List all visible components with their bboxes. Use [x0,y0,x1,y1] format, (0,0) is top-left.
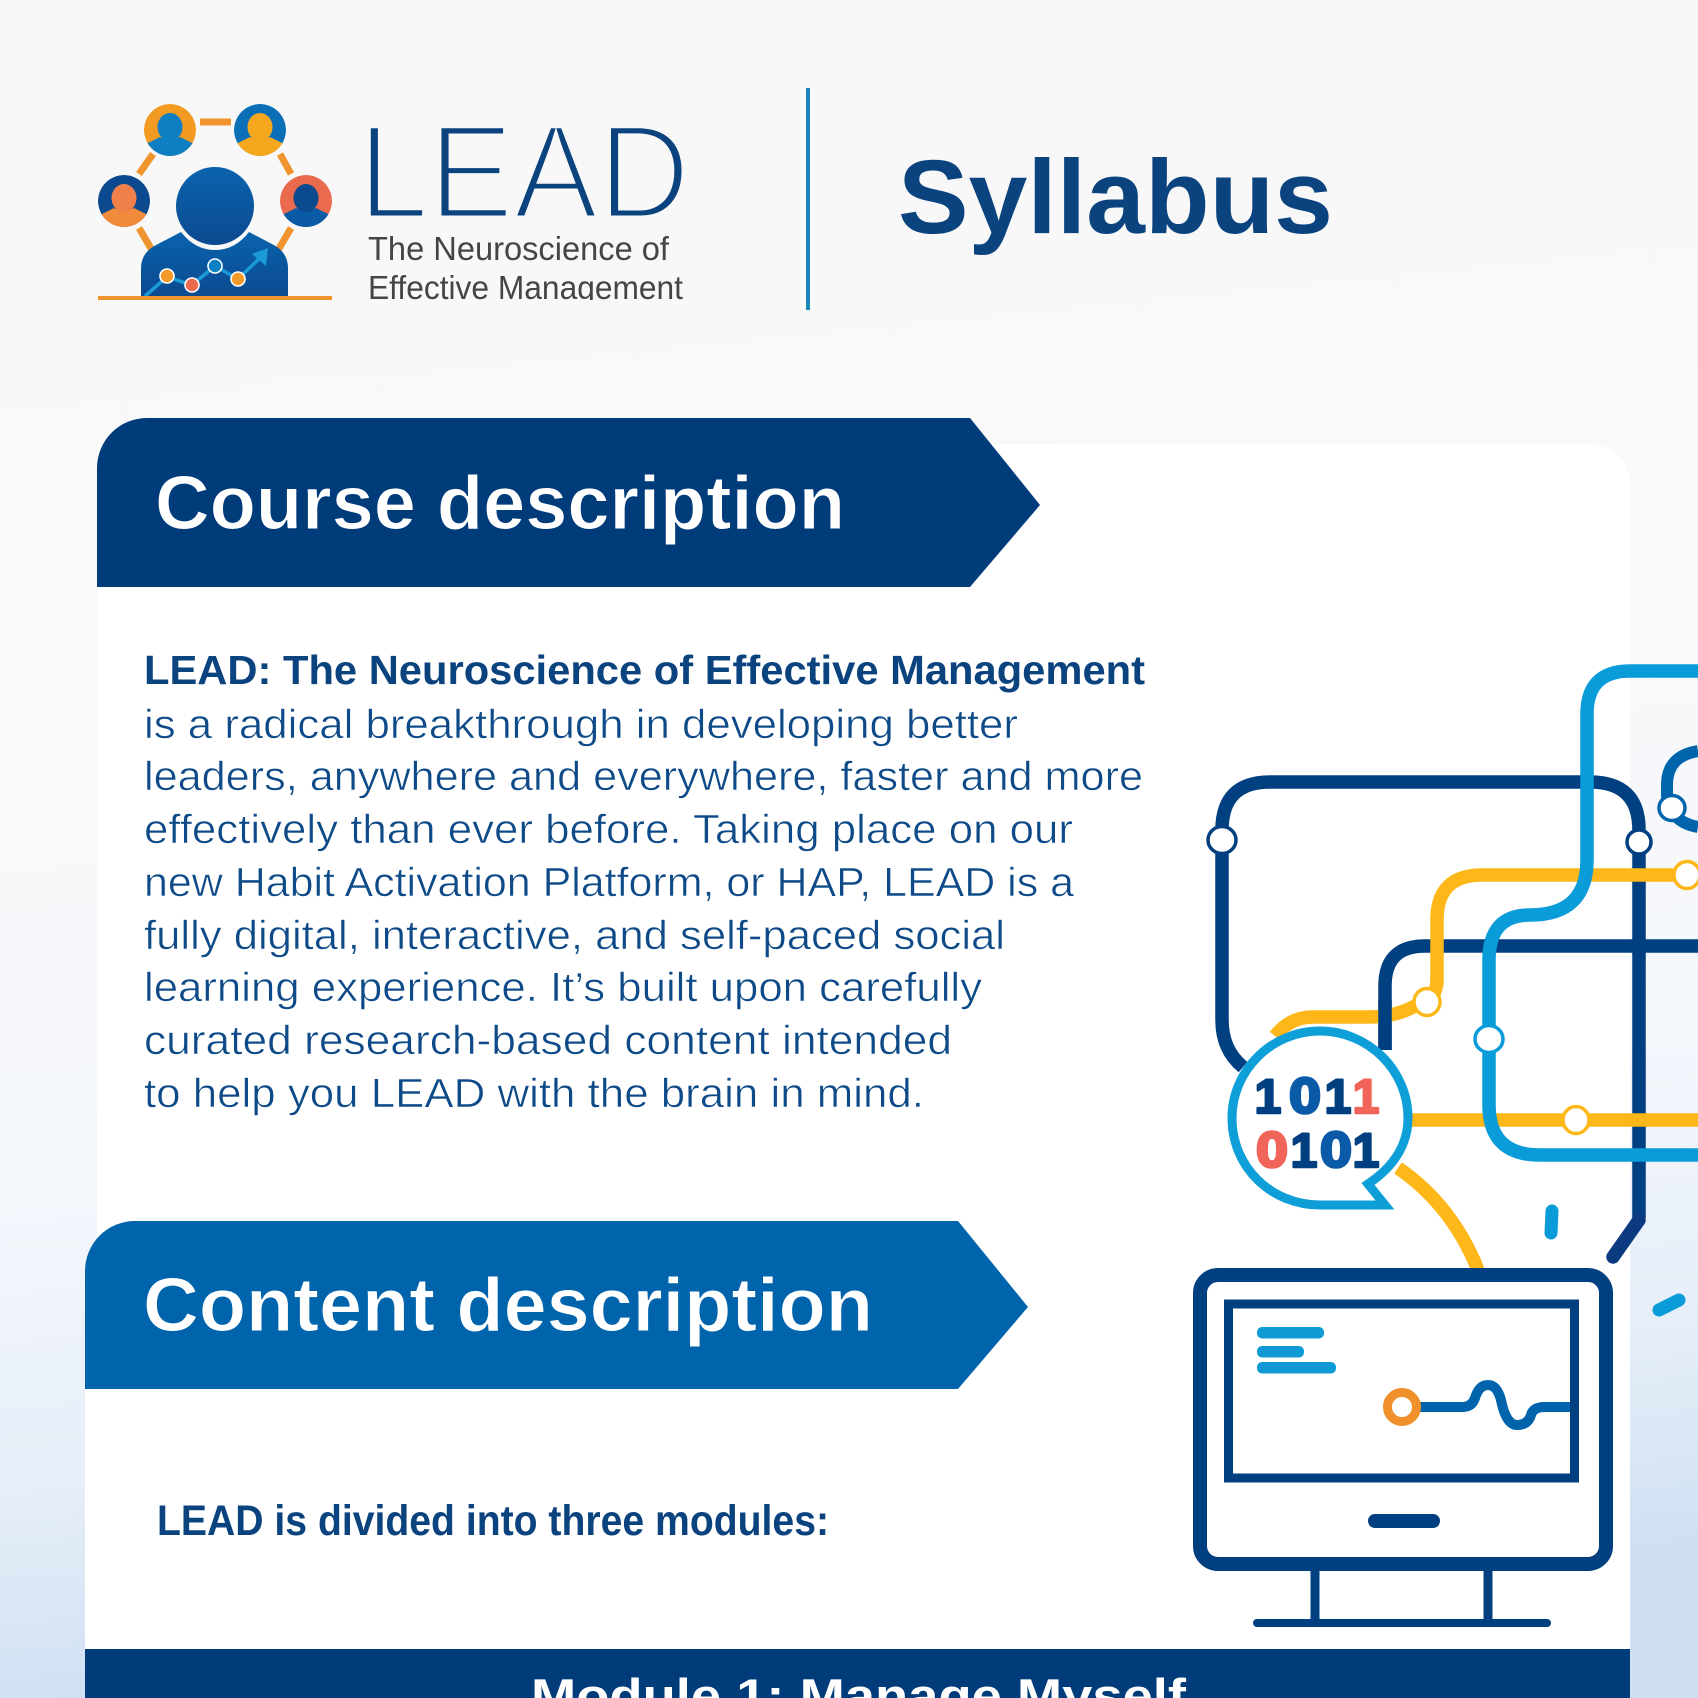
yellow line: upper [1275,875,1698,1036]
logo tagline: Effective Management [368,269,683,306]
banner: Course description [97,418,1040,587]
headset arc [1667,751,1698,827]
text block: course description body: new Habit Activation Platform, or HAP, LEAD is a [144,859,1074,905]
speech bubble: binary: 1 [1325,1071,1351,1124]
title: Syllabus: Syllabus [898,139,1333,256]
yellow line: middle [1405,1113,1698,1127]
navy line: inner [1385,946,1698,1050]
text: modules intro: LEAD is divided into three modules: [157,1497,829,1545]
speech bubble: binary: 0 [1256,1124,1288,1179]
banner: Content description: Content description [143,1263,873,1348]
text block: course description body: effectively than ever before. Taking place on our [144,806,1073,852]
speech bubble: binary: 0 [1320,1124,1352,1179]
text block: course description body: to help you LEAD with the brain in mind. [144,1070,924,1116]
speech bubble: binary [1232,1031,1408,1205]
header divider [806,88,810,310]
text block: course description body: leaders, anywhere and everywhere, faster and more [144,753,1143,799]
logo tagline: The Neuroscience of [368,230,670,267]
navy line: tail [1613,1220,1639,1257]
banner: Content description [85,1221,1028,1389]
text block: course description body [144,647,1145,1116]
text block: course description body: is a radical breakthrough in developing better [144,701,1018,747]
accent dashes [1551,1211,1679,1310]
logo tagline [368,236,683,300]
network nodes [1208,796,1698,1134]
white content panel [85,444,1630,1698]
navy line: loop [1222,782,1639,1218]
speech bubble: binary: 1 [1255,1071,1281,1124]
text block: course description body: learning experience. It’s built upon carefully [144,964,983,1010]
speech bubble: binary: 1 [1353,1125,1379,1178]
speech bubble: binary: 1 [1291,1125,1317,1178]
text block: course description body: curated research-based content intended [144,1017,952,1063]
text block: course description body: LEAD: The Neuroscience of Effective Management [144,647,1145,693]
logo wordmark: LEAD [358,98,690,247]
speech bubble: binary: 1 [1353,1071,1379,1124]
text block: course description body: fully digital, interactive, and self-paced social [144,912,1005,958]
banner: Course description: Course description [155,461,845,546]
light blue line [1489,671,1698,1155]
monitor icon [1200,1275,1606,1627]
illustration: network lines [1222,671,1698,1270]
module 1 bar [85,1649,1630,1698]
yellow line: to monitor [1398,1168,1478,1270]
header logo: LEAD [98,98,690,306]
icon: team network [98,104,332,300]
navy crossing over yellow [1378,1000,1392,1050]
speech bubble: binary: 0 [1289,1070,1321,1125]
